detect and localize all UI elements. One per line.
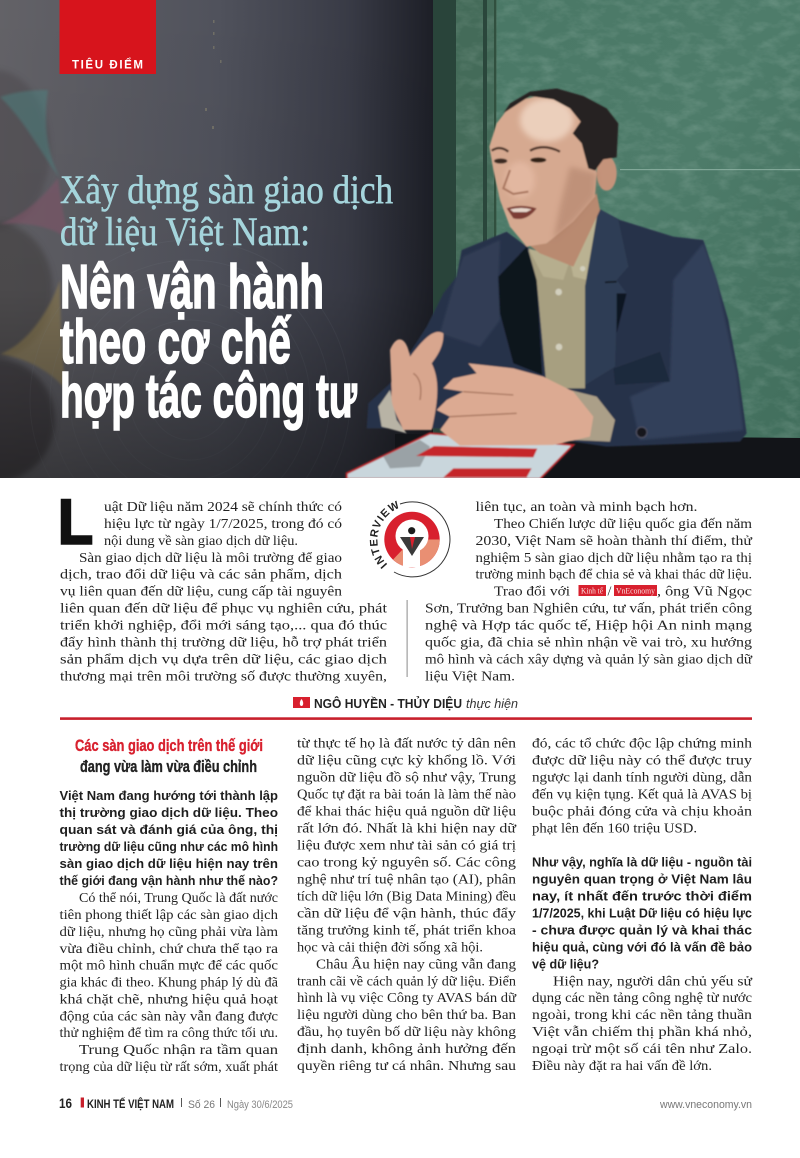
intro text: right column: / — [608, 584, 612, 600]
table surface — [395, 434, 800, 478]
section tag: TIÊU ĐIỂM — [60, 0, 156, 74]
resting right hand — [437, 363, 593, 446]
interview question 2: 1/7/2025, khi Luật Dữ liệu có hiệu lực — [532, 906, 752, 920]
blazer — [367, 208, 747, 447]
article column 2: liệu được xem như tài sản có giá trị — [297, 838, 516, 854]
intro text: left column — [58, 488, 387, 684]
footer: KINH TẾ VIỆT NAM — [87, 1098, 174, 1111]
intro text: right column: Theo Chiến lược dữ liệu quốc gia đến năm — [494, 517, 752, 532]
intro text: right column: quốc gia, đã chia sẻ nhìn nhận về vai trò, xu hướng — [425, 636, 752, 650]
answer 2 text: ngoài, trong khi các nền tảng thuần — [532, 1008, 752, 1023]
answer text: trọng của dữ liệu từ rất sớm, xuất phát — [60, 1060, 278, 1075]
intro text: left column: uật Dữ liệu năm 2024 sẽ chính thức có — [104, 500, 342, 515]
article column 2: tích dữ liệu lớn (Big Data Mining) đều — [297, 890, 516, 904]
article column 1 — [60, 788, 279, 1075]
drop cap L: L — [58, 488, 93, 558]
intro text: right column: liệu Việt Nam. — [425, 670, 515, 684]
intro text: left column: nội dung về sàn giao dịch dữ liệu. — [104, 534, 298, 549]
intro text: right column: 2030, Việt Nam sẽ hoàn thành thí điểm, thử — [476, 534, 752, 549]
article column 2: tăng trưởng kinh tế, phát triển khoa — [297, 924, 517, 938]
headline — [60, 167, 393, 431]
byline: thực hiện — [466, 696, 518, 711]
answer text: vừa điều chỉnh, chứ chưa thể tạo ra — [60, 942, 279, 957]
article column 2: quyền riêng tư cá nhân. Nhưng sau — [297, 1059, 516, 1074]
answer text: gia khác đi theo. Khung pháp lý dù đã — [60, 976, 279, 990]
answer 2 text: Điều này đặt ra hai vấn đề lớn. — [532, 1059, 712, 1074]
answer text continued: được dữ liệu này có thể được truy — [532, 754, 752, 768]
article column 2: nguồn dữ liệu đồ sộ như vậy, Trung — [297, 770, 516, 786]
intro text: left column: dịch, trao đổi dữ liệu và các sản phẩm, dịch — [60, 568, 342, 582]
section subheading — [75, 736, 263, 776]
article column 2 — [297, 736, 517, 1074]
answer text: dữ liệu, nhưng họ cũng phải vừa làm — [60, 925, 278, 940]
inline tag: VnEconomy: VnEconomy — [616, 586, 655, 596]
article column 2: định danh, không ảnh hưởng đến — [297, 1042, 516, 1057]
interview question 1: quan sát và đánh giá của ông, thị — [60, 822, 278, 837]
icon: interview badge — [370, 500, 450, 578]
shirt — [526, 250, 587, 390]
shirt cuff — [570, 390, 615, 442]
interview question 1: thế giới đang vận hành như thế nào? — [60, 873, 278, 888]
interview question 2 — [532, 854, 752, 972]
intro text: left column: thương mại trên môi trường số được thường xuyên, — [60, 670, 387, 684]
headline in bold white condensed: theo cơ chế — [60, 308, 291, 377]
article column 2: rất lớn đó. Nhất là khi hiện nay dữ — [297, 822, 516, 836]
answer text — [60, 891, 279, 1075]
section subheading: đang vừa làm vừa điều chỉnh — [80, 757, 257, 776]
interview question 2: - chưa được quản lý và khai thác — [532, 922, 752, 938]
answer text: một mô hình chuẩn mực để các quốc — [60, 958, 278, 974]
footer: www.vneconomy.vn — [659, 1099, 752, 1111]
eyes, nose, mouth — [492, 148, 508, 152]
answer text: động của các sàn này vẫn đang được — [60, 1010, 278, 1024]
headline in bold white condensed: hợp tác công tư — [60, 362, 357, 431]
headline line in light blue serif: Xây dựng sàn giao dịch — [60, 167, 393, 212]
answer text continued: đến vụ kiện tụng. Kết quả là AVAS bị — [532, 788, 752, 802]
right lapel — [585, 208, 628, 385]
answer text: tiên phong thiết lập các sàn giao dịch — [60, 908, 278, 923]
article column 2: dữ liệu cũng cực kỳ khổng lồ. Với — [297, 754, 516, 768]
raised left hand — [390, 332, 443, 430]
answer 2 text — [532, 974, 752, 1074]
icon: red byline marker — [293, 697, 310, 708]
answer text: thử nghiệm để tìm ra công thức tối ưu. — [60, 1026, 278, 1041]
man in navy blazer — [347, 88, 747, 479]
answer text: Trung Quốc nhận ra tầm quan — [79, 1043, 278, 1058]
inline tag: Kinh tế: Kinh tế — [581, 586, 603, 596]
intro text: left column: hiệu lực từ ngày 1/7/2025, trong đó có — [104, 517, 342, 532]
answer text continued: buộc phải đóng cửa và chịu khoản — [532, 804, 752, 820]
footer — [59, 1095, 752, 1111]
byline: NGÔ HUYỀN - THỦY DIỆU — [314, 696, 462, 711]
headline line in light blue serif — [60, 167, 393, 254]
article column 2: hình là vụ việc Công ty AVAS bán dữ — [297, 991, 516, 1006]
magazine on the table — [347, 433, 573, 479]
article column 2: cao trong kỷ nguyên số. Các công — [297, 856, 516, 870]
answer text continued: ngược lại danh tính người dùng, dẫn — [532, 770, 752, 786]
intro text: left column: triển khởi nghiệp, đổi mới sáng tạo,... qua đó thúc — [60, 618, 387, 634]
interview question 2: vệ dữ liệu? — [532, 956, 599, 972]
face — [489, 94, 597, 247]
interview question 2: nay, ít nhất đến trước thời điểm — [532, 888, 752, 904]
article column 2: liệu người dùng cho bên thứ ba. Ban — [297, 1008, 516, 1023]
article column 2: tranh cãi về cách quản lý dữ liệu. Điển — [297, 974, 516, 990]
intro text: right column: mô hình và cách xây dựng và quản lý sàn giao dịch dữ — [425, 652, 752, 668]
hero photo: interviewee in front of backdrop and green marble wall — [0, 0, 800, 478]
intro text: left column: vụ liên quan đến dữ liệu, cung cấp tài nguyên — [60, 584, 342, 600]
dark backdrop with light-string artwork — [0, 0, 433, 478]
answer text continued: phạt lên đến 160 triệu USD. — [532, 822, 697, 836]
green marble wall — [433, 0, 800, 478]
headline in bold white condensed: Nên vận hành — [60, 253, 324, 322]
interview question 2: Như vậy, nghĩa là dữ liệu - nguồn tài — [532, 854, 752, 870]
footer: 16 — [59, 1095, 72, 1111]
headline line in light blue serif: dữ liệu Việt Nam: — [60, 209, 310, 254]
intro text: right column: trường minh bạch để chia sẻ và khai thác dữ liệu. — [476, 568, 752, 582]
hair — [503, 88, 618, 171]
intro text: right column: nghệ và Hợp tác quốc tế, Hiệp hội An ninh mạng — [425, 618, 752, 634]
article column 2: từ thực tế họ là đất nước tỷ dân nên — [297, 736, 516, 752]
intro text: left column: đẩy hình thành thị trường dữ liệu, hỗ trợ phát triển — [60, 636, 387, 650]
interview question 1: thị trường giao dịch dữ liệu. Theo — [60, 805, 278, 820]
article column 3 — [532, 736, 752, 1074]
section subheading: Các sàn giao dịch trên thế giới — [75, 736, 263, 755]
intro text: right column: , ông Vũ Ngọc — [657, 584, 752, 600]
answer 2 text: Việt vẫn chiếm thị phần khá nhỏ, — [532, 1025, 752, 1040]
intro text: right column: nghiệm 5 sàn giao dịch dữ liệu nhằm tạo ra thị — [476, 551, 752, 566]
answer text: Có thể nói, Trung Quốc là đất nước — [79, 891, 278, 906]
intro text: left column: liên quan đến dữ liệu để phục vụ nghiên cứu, phát — [60, 602, 387, 616]
neck and ear — [527, 193, 600, 267]
icon: interview badge: INTERVIEW — [370, 500, 398, 569]
answer text continued — [532, 736, 752, 836]
section tag: TIÊU ĐIỂM: TIÊU ĐIỂM — [72, 58, 143, 72]
answer 2 text: ngoại trừ một số cái tên như Zalo. — [532, 1042, 752, 1057]
article column 2: đầu, họ tuyên bố dữ liệu này không — [297, 1025, 516, 1040]
footer: Số 26 — [188, 1099, 215, 1111]
answer 2 text: dụng các nền tảng công nghệ từ nước — [532, 991, 752, 1006]
article column 2: để khai thác hiệu quả nguồn dữ liệu — [297, 804, 516, 820]
interview question 1: trường dữ liệu cũng như các mô hình — [60, 839, 278, 854]
article column 2: Châu Âu hiện nay cũng vẫn đang — [316, 956, 516, 972]
answer 2 text: Hiện nay, người dân chủ yếu sử — [553, 974, 752, 990]
intro text: right column: Sơn, Trưởng ban Nghiên cứu, tư vấn, phát triển công — [425, 602, 752, 616]
article column 2: Quốc tự đặt ra bài toán là làm thế nào — [297, 788, 516, 802]
answer text continued: đó, các tổ chức độc lập chứng minh — [532, 736, 752, 752]
interview question 1 — [60, 788, 278, 888]
headline in bold white condensed — [60, 253, 357, 431]
article column 2: học và cải thiện đời sống xã hội. — [297, 940, 483, 956]
intro text: right column: Trao đổi với — [494, 584, 570, 600]
article column 2: cần dữ liệu để vận hành, thúc đẩy — [297, 906, 516, 922]
intro text: left column: Sàn giao dịch dữ liệu là môi trường để giao — [79, 551, 342, 566]
interview question 1: sàn giao dịch dữ liệu hiện nay trên — [60, 856, 278, 871]
intro text: right column — [425, 500, 752, 684]
footer: Ngày 30/6/2025 — [227, 1099, 293, 1111]
intro text: right column: liên tục, an toàn và minh bạch hơn. — [476, 500, 698, 515]
interview question 1: Việt Nam đang hướng tới thành lập — [60, 788, 278, 803]
interview question 2: nguyên quan trọng ở Việt Nam lâu — [532, 872, 752, 886]
article column 2: nghệ như trí tuệ nhân tạo (AI), phân — [297, 872, 516, 888]
answer text: khá chặt chẽ, nhưng hiệu quả hoạt — [60, 992, 278, 1008]
interview question 2: hiệu quả, cùng với đó là vấn đề bảo — [532, 940, 752, 954]
intro text: left column: sản phẩm dịch vụ dựa trên dữ liệu, các giao dịch — [60, 652, 387, 668]
